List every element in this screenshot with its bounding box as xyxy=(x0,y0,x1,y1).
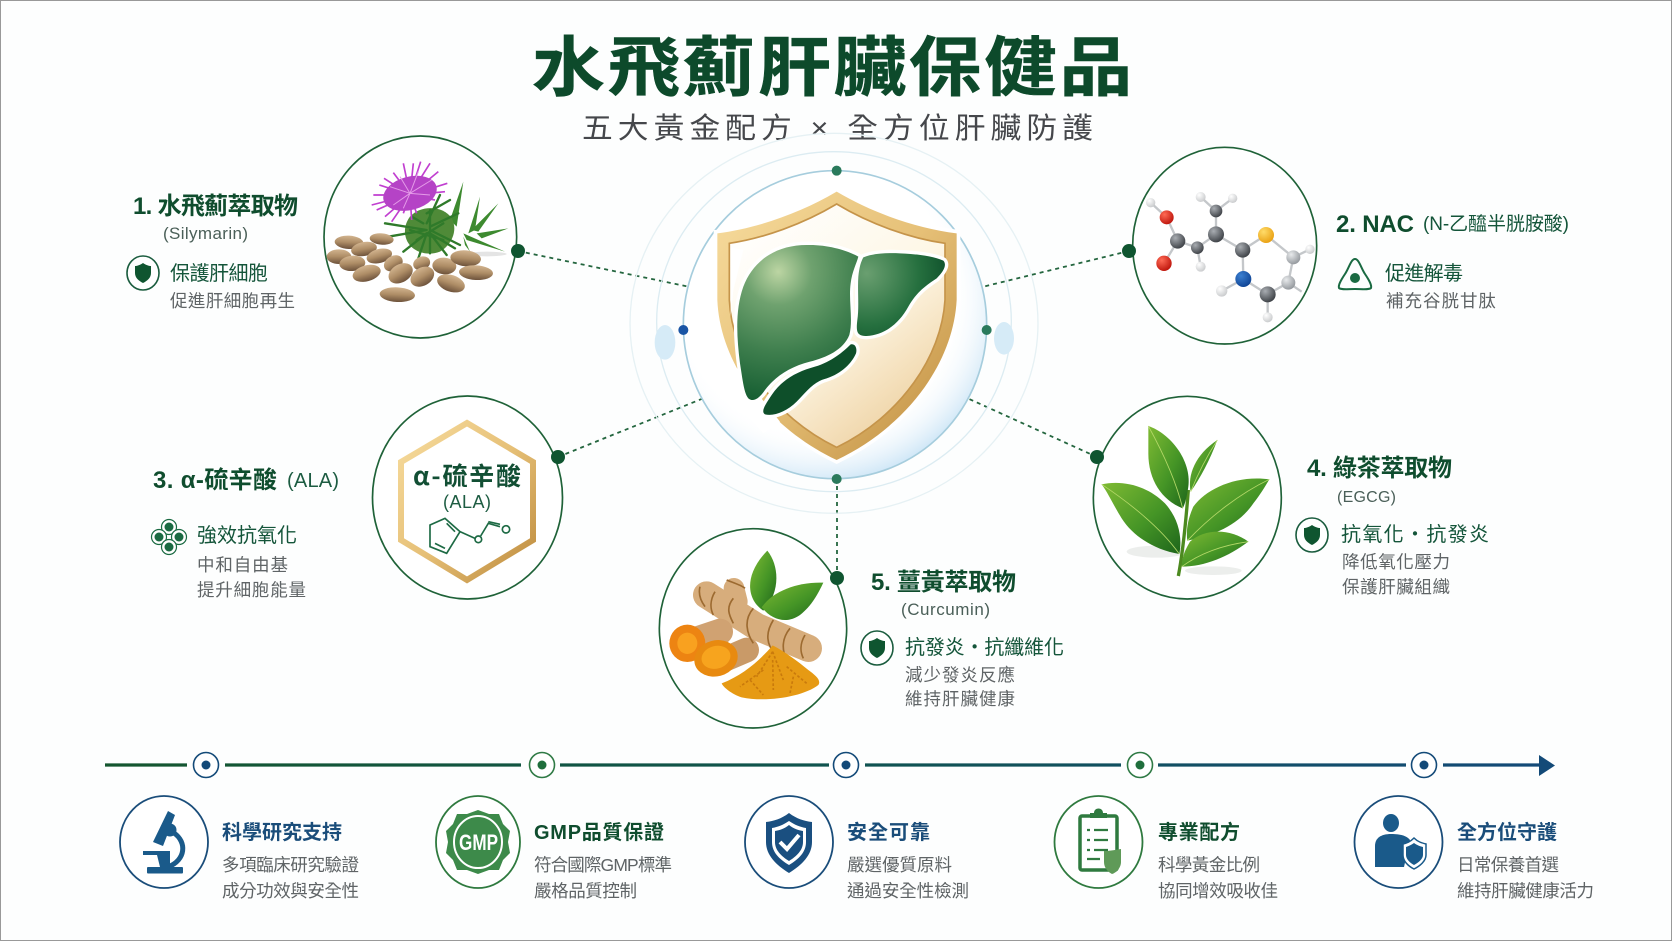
latin name: (EGCG) xyxy=(1337,489,1396,506)
illustration: milk thistle and seeds xyxy=(324,136,517,338)
heading: 1. 水飛薊萃取物 xyxy=(133,193,298,220)
description line 2: 嚴格品質控制 xyxy=(534,881,637,901)
feature: research xyxy=(120,796,360,901)
icon: shield check xyxy=(745,796,833,888)
panel 4: EGCG xyxy=(1090,396,1489,599)
benefit: 抗氧化・抗發炎 xyxy=(1341,523,1489,546)
panel 5: curcumin xyxy=(659,529,1064,728)
heading: 安全可靠 xyxy=(847,820,930,844)
heading: 全方位守護 xyxy=(1457,820,1557,844)
node dot xyxy=(1090,450,1104,464)
heading: GMP品質保證 xyxy=(534,820,664,844)
feature: formula xyxy=(1054,796,1278,901)
icon: gold shield xyxy=(717,192,957,460)
icon: microscope xyxy=(120,796,208,888)
timeline arrow xyxy=(105,752,1555,778)
description line 1: 多項臨床研究驗證 xyxy=(222,855,360,875)
icon: liver xyxy=(737,245,945,415)
description line 1: 減少發炎反應 xyxy=(905,665,1015,685)
illustration: gold hexagon with ALA label xyxy=(372,396,562,599)
description line 2: 維持肝臟健康 xyxy=(905,689,1015,709)
heading: 3. α-硫辛酸 xyxy=(153,466,277,494)
description: 補充谷胱甘肽 xyxy=(1386,291,1496,311)
benefit: 抗發炎・抗纖維化 xyxy=(905,636,1064,659)
description line 2: 通過安全性檢測 xyxy=(847,881,969,901)
latin name: (ALA) xyxy=(287,470,339,492)
heading: 4. 綠茶萃取物 xyxy=(1307,455,1452,482)
description line 1: 嚴選優質原料 xyxy=(847,855,952,875)
feature: protection xyxy=(1354,796,1594,901)
node dot xyxy=(551,450,565,464)
description line 2: 提升細胞能量 xyxy=(197,580,306,600)
illustration: gold hexagon with ALA label: α-硫辛酸 xyxy=(413,457,521,493)
panel 2: NAC xyxy=(1122,147,1569,344)
icon: shield badge xyxy=(127,256,159,290)
icon: shield badge xyxy=(861,631,893,665)
icon: GMP badge: GMP xyxy=(459,830,498,855)
illustration: tea leaves xyxy=(1093,396,1281,599)
node dot xyxy=(511,244,525,258)
description line 1: 符合國際GMP標準 xyxy=(534,855,672,875)
heading: 5. 薑黃萃取物 xyxy=(871,569,1016,596)
icon: GMP badge xyxy=(436,796,520,888)
heading: 科學研究支持 xyxy=(222,821,342,844)
icon: person with shield xyxy=(1354,796,1442,888)
icon: clipboard xyxy=(1054,796,1142,888)
icon: detox triangle xyxy=(1339,259,1371,289)
description line 2: 維持肝臟健康活力 xyxy=(1457,881,1594,901)
panel 1: silymarin xyxy=(127,136,525,338)
illustration: molecule xyxy=(1133,147,1317,344)
node dot xyxy=(1122,244,1136,258)
description: 促進肝細胞再生 xyxy=(170,291,295,311)
ring nodes xyxy=(678,166,992,484)
connector: dashed lines to central shield xyxy=(518,251,1129,578)
icon: antioxidant cluster xyxy=(152,520,186,554)
description line 2: 成分功效與安全性 xyxy=(222,881,359,901)
node dot xyxy=(830,571,844,585)
chemical name: (N-乙醯半胱胺酸) xyxy=(1423,213,1569,235)
title: 水飛薊肝臟保健品 xyxy=(532,15,1132,109)
benefit: 促進解毒 xyxy=(1385,262,1463,285)
central emblem: liver shield with protective rings xyxy=(630,133,1038,513)
benefit: 保護肝細胞 xyxy=(170,262,268,285)
panel 3: ALA xyxy=(152,396,565,600)
description line 2: 保護肝臟組織 xyxy=(1342,577,1450,597)
subtitle: 五大黃金配方 × 全方位肝臟防護 xyxy=(582,113,1093,145)
illustration: gold hexagon with ALA label: (ALA) xyxy=(443,492,491,512)
description line 2: 協同增效吸收佳 xyxy=(1158,881,1278,901)
feature: GMP xyxy=(436,796,672,901)
illustration: turmeric xyxy=(659,529,847,728)
description line 1: 降低氧化壓力 xyxy=(1342,552,1450,572)
description line 1: 科學黃金比例 xyxy=(1158,855,1260,875)
latin name: (Curcumin) xyxy=(901,600,990,619)
feature: safety xyxy=(745,796,969,901)
heading: 專業配方 xyxy=(1158,820,1240,844)
description line 1: 中和自由基 xyxy=(197,555,288,575)
benefit: 強效抗氧化 xyxy=(197,524,297,547)
icon: shield badge xyxy=(1296,518,1328,552)
description line 1: 日常保養首選 xyxy=(1457,855,1559,875)
latin name: (Silymarin) xyxy=(163,224,248,243)
heading: 2. NAC xyxy=(1336,211,1414,238)
